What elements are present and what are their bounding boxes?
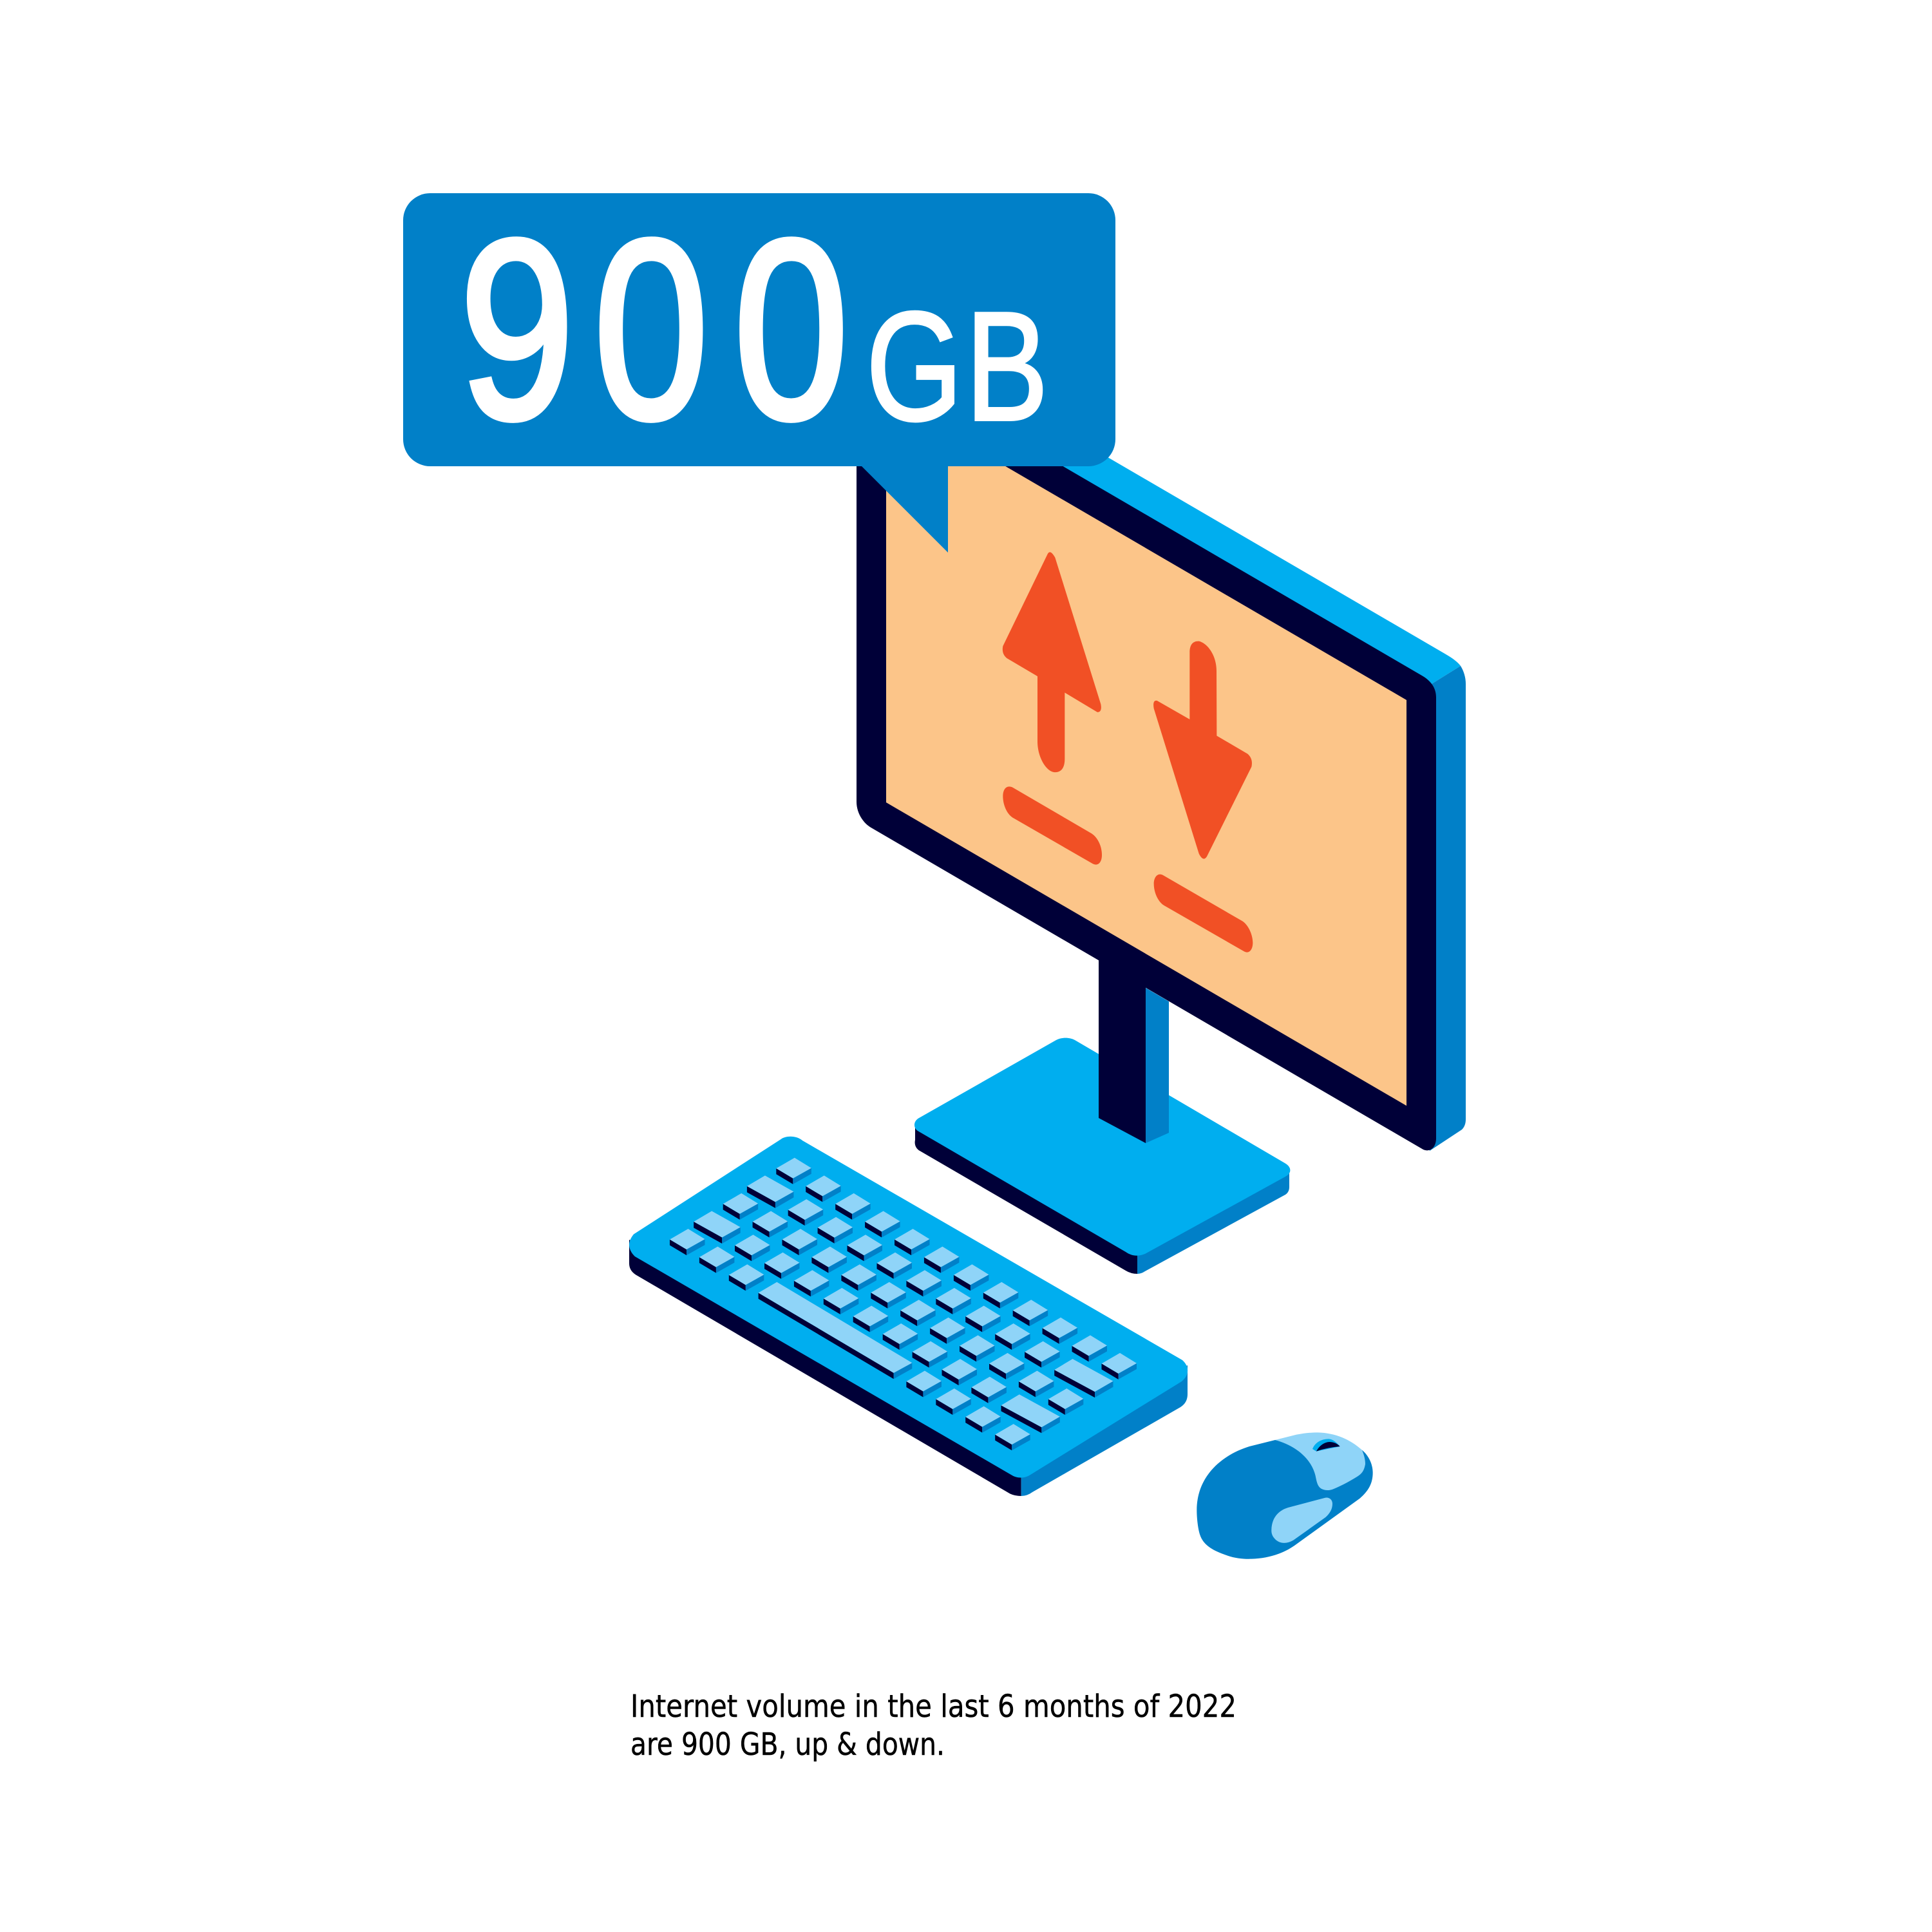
bubble shape	[403, 193, 1115, 553]
caption line 2: are 900 GB, up & down.	[630, 1727, 945, 1763]
mouse top button	[1275, 1432, 1365, 1490]
upload baseline	[1003, 786, 1102, 865]
base left side	[915, 1124, 1137, 1274]
space bar	[759, 1282, 912, 1379]
screen	[886, 397, 1406, 1106]
stand neck front	[1099, 947, 1146, 1143]
monitor top edge	[1030, 412, 1461, 684]
monitor frame	[857, 346, 1436, 1150]
monitor right side	[1417, 666, 1466, 1151]
monitor	[857, 346, 1466, 1274]
speech bubble	[403, 188, 1115, 553]
keys	[670, 1158, 1137, 1450]
download baseline	[1154, 875, 1253, 952]
scroll wheel rim	[1312, 1439, 1340, 1452]
unit GB: GB	[866, 279, 1048, 453]
mouse	[1197, 1432, 1373, 1559]
upload arrow	[1003, 552, 1101, 772]
keyboard left side	[629, 1240, 1021, 1496]
caption line 1: Internet volume in the last 6 months of 2022	[630, 1689, 1236, 1725]
base top	[914, 1038, 1290, 1256]
download arrow	[1153, 641, 1252, 859]
caption	[630, 1689, 1236, 1763]
mouse body	[1197, 1440, 1373, 1559]
screen arrows	[1003, 552, 1253, 952]
mouse side button	[1271, 1498, 1332, 1543]
base right side	[1137, 1169, 1289, 1274]
keyboard right side	[1021, 1365, 1188, 1496]
keyboard	[629, 1137, 1188, 1496]
scroll wheel	[1316, 1442, 1340, 1452]
stand neck side	[1146, 988, 1169, 1143]
keyboard top	[629, 1137, 1188, 1477]
stand base	[914, 1038, 1290, 1274]
value 900: 900	[460, 188, 848, 472]
